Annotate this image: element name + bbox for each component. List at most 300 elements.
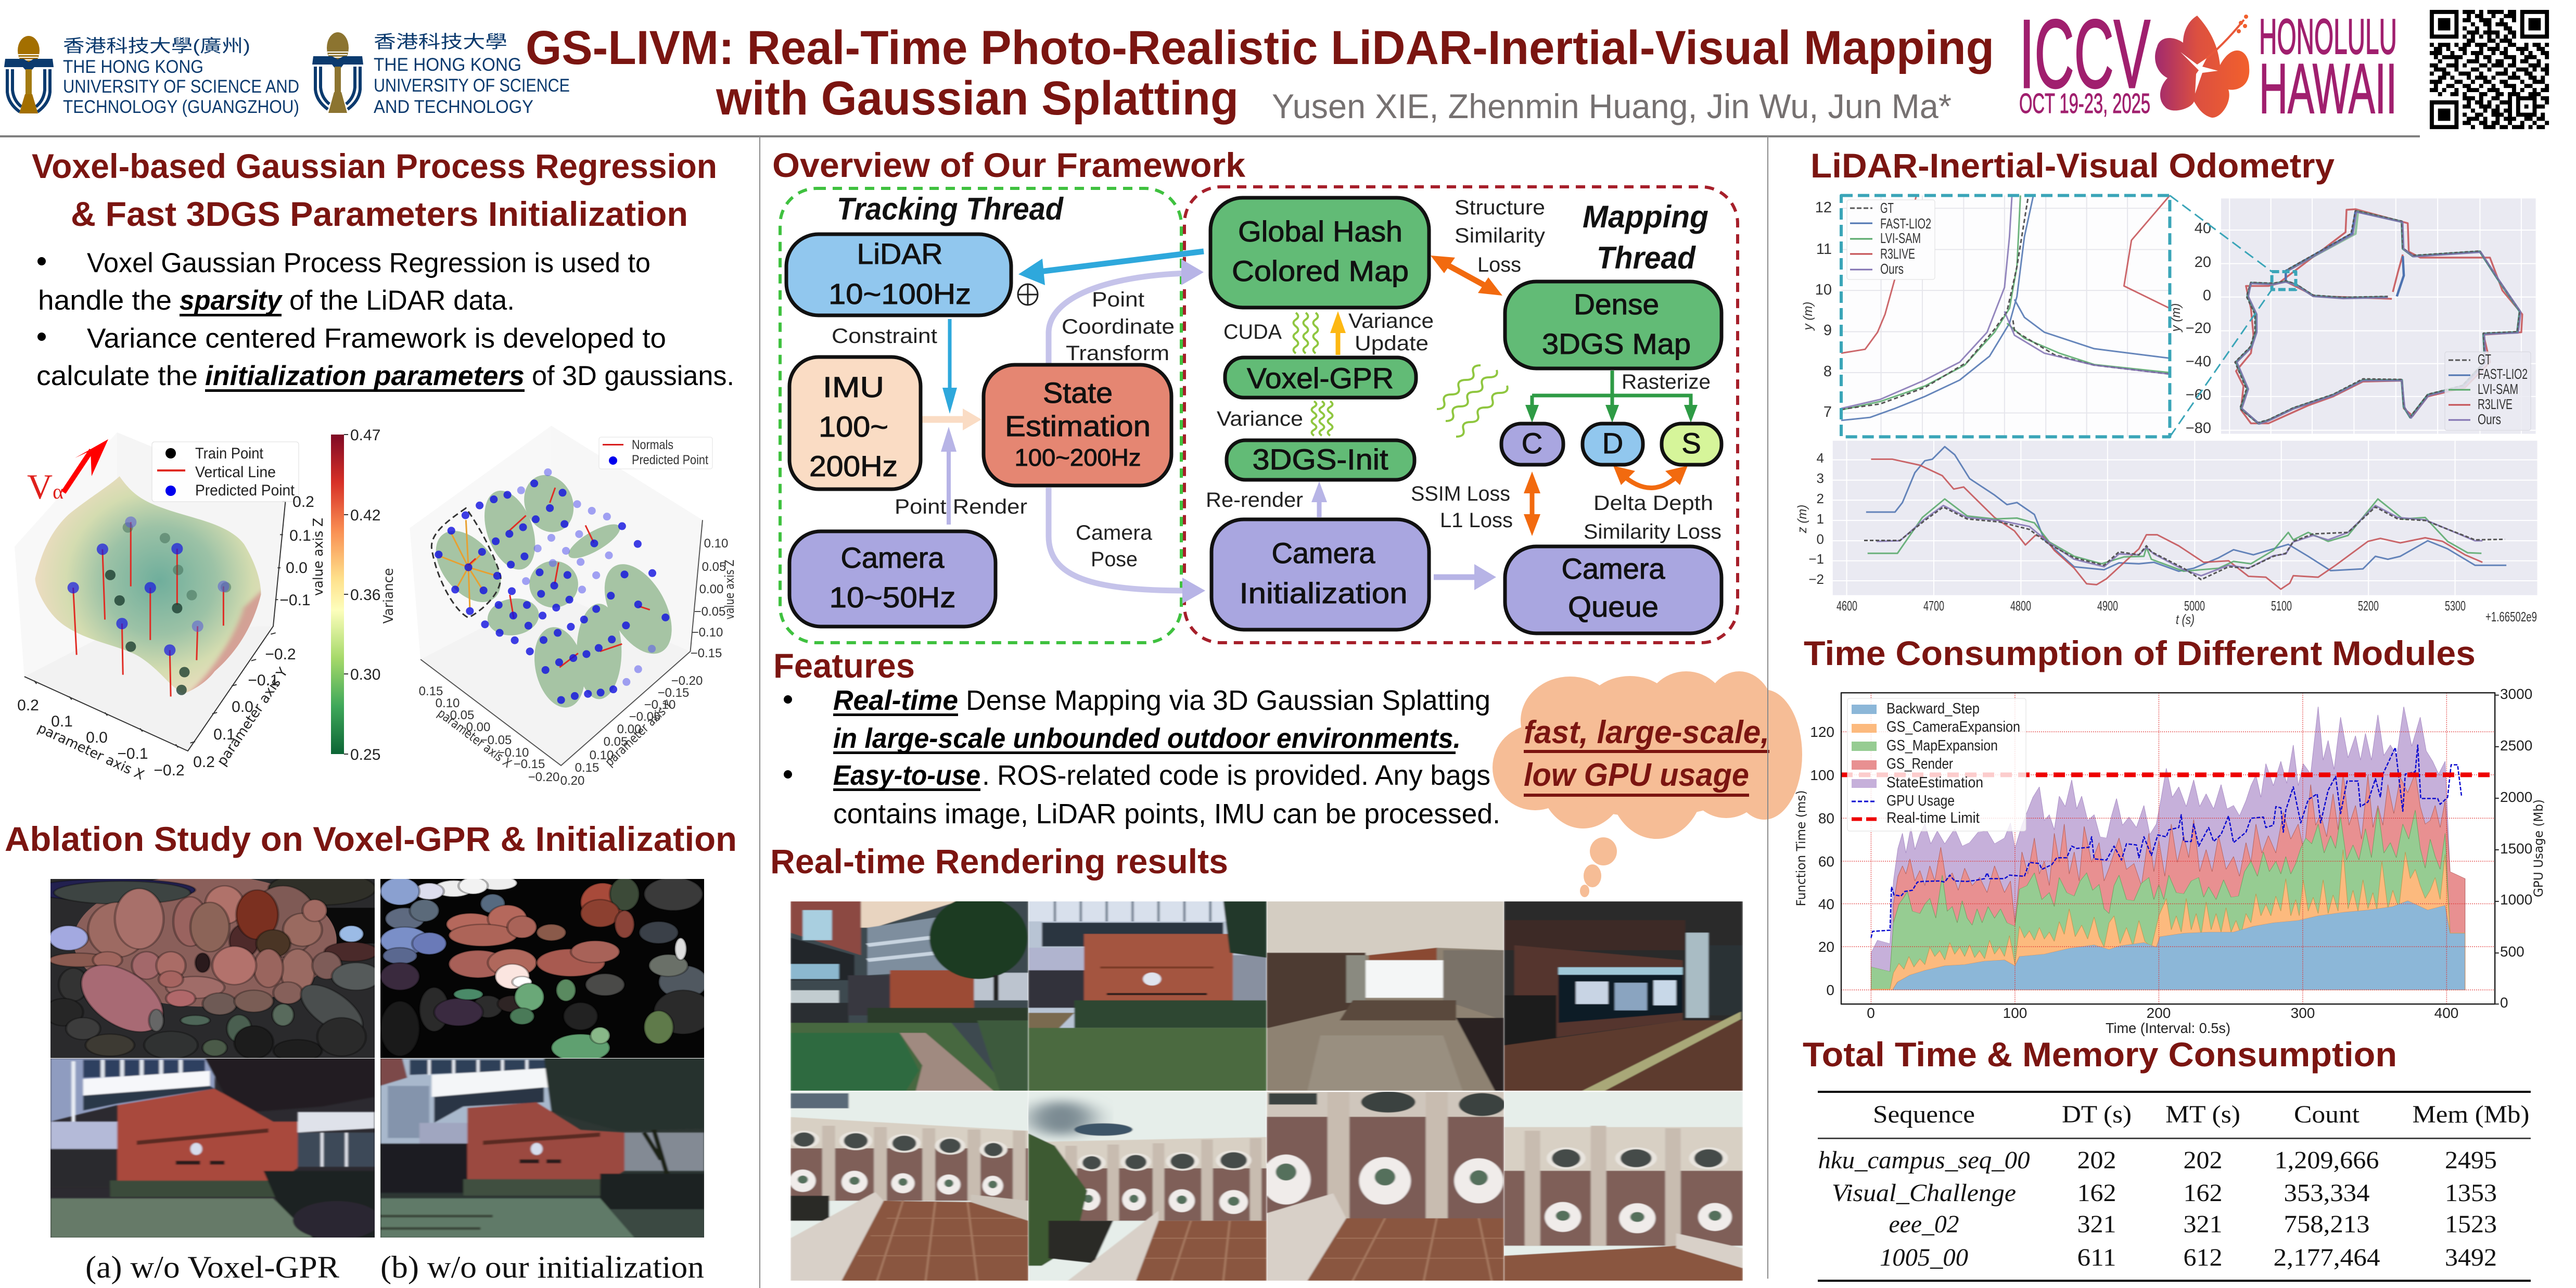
node: dense 3DGS map: Dense bbox=[1574, 288, 1659, 321]
node: state estimation: 100~200Hz bbox=[1015, 444, 1141, 471]
axis labels: scatter plot: −0.10 bbox=[644, 698, 675, 712]
labels: flow annotations: Rasterize bbox=[1622, 371, 1711, 393]
axis labels: z plot: 0 bbox=[1817, 531, 1824, 547]
arrow: camera init to queue bbox=[1434, 564, 1496, 590]
legend: time chart: GS_CameraExpansion bbox=[1886, 719, 2020, 735]
axis labels: inset: 8 bbox=[1823, 363, 1832, 380]
figure: rendering without our initialization bbox=[380, 1059, 704, 1238]
axis labels: scatter plot: 0.15 bbox=[419, 684, 443, 698]
title: GS-LIVM: Real-Time Photo-Realistic LiDAR-Inertial-Visual Mapping bbox=[526, 21, 1994, 74]
node: camera sensor bbox=[789, 531, 996, 627]
axis title: trajectory y: y (m) bbox=[2169, 303, 2183, 333]
heading: time consumption: Time Consumption of Different Modules bbox=[1804, 634, 2476, 672]
heading: rendering results: Real-time Rendering results bbox=[770, 842, 1228, 881]
legend: trajectory: LVI-SAM bbox=[2478, 381, 2518, 397]
legend: scatter plot: Normals bbox=[632, 438, 673, 452]
axis labels: scatter plot: −0.15 bbox=[691, 646, 722, 660]
axis labels: surface plot: value axis Z bbox=[311, 518, 326, 596]
axis labels: time chart: 40 bbox=[1818, 896, 1834, 912]
text block: GPR bullets: sparsity bbox=[180, 285, 283, 316]
axis labels: surface plot: 0.1 bbox=[213, 726, 235, 743]
legend: time chart: GS_MapExpansion bbox=[1886, 737, 1998, 754]
photo: arched building C bbox=[1267, 1092, 1504, 1281]
axis labels: z plot: +1.66502e9 bbox=[2485, 609, 2537, 624]
text: HAWAII: HAWAII bbox=[2259, 49, 2397, 128]
node: camera queue: Camera bbox=[1561, 552, 1665, 585]
text block: features bullets: Real-time bbox=[833, 685, 958, 716]
axis labels: scatter plot: 0.10 bbox=[436, 696, 460, 710]
axis labels: time chart: 120 bbox=[1810, 724, 1834, 740]
chart: variance surface 3D plot bbox=[15, 427, 397, 783]
table header: MT (s) bbox=[2165, 1101, 2240, 1128]
panel: total time and memory bbox=[1803, 1035, 2531, 1282]
heading: voxel-based GPR line 1: Voxel-based Gaussian Process Regression bbox=[32, 147, 717, 185]
axis labels: scatter plot: −0.20 bbox=[671, 674, 703, 688]
text: HKUST GZ English line 1: THE HONG KONG bbox=[63, 57, 203, 77]
text block: GPR bullets: initialization parameters bbox=[205, 361, 525, 391]
photo: arched building D bbox=[1504, 1092, 1743, 1281]
photo: campus building close bbox=[1028, 901, 1267, 1091]
table row: eee_02: eee_02 bbox=[1889, 1210, 1959, 1238]
table header: Mem (Mb) bbox=[2413, 1101, 2529, 1128]
axis labels: z plot: 5300 bbox=[2445, 598, 2466, 614]
text: ICCV: ICCV bbox=[2019, 0, 2150, 108]
heading: overview: Overview of Our Framework bbox=[772, 146, 1245, 184]
axis labels: surface plot: −0.1 bbox=[117, 745, 148, 762]
axis labels: scatter plot: 0.05 bbox=[450, 708, 474, 722]
photo: arched building B bbox=[1028, 1092, 1267, 1281]
text: HKUST GZ Chinese name: 香港科技大學(廣州) bbox=[63, 36, 250, 56]
axis labels: scatter plot: 0.00 bbox=[617, 722, 641, 736]
axis labels: time chart: 1000 bbox=[2500, 891, 2532, 908]
node: 3DGS-Init: 3DGS-Init bbox=[1252, 443, 1388, 476]
node: global hash colored map: Global Hash bbox=[1238, 215, 1402, 248]
table row: Visual_Challenge: 162 bbox=[2077, 1179, 2116, 1207]
arrow: SSIM and L1 loss bbox=[1524, 471, 1540, 536]
text block: GPR bullets: calculate the bbox=[36, 361, 198, 391]
arrow: map to LiDAR bbox=[1018, 251, 1204, 285]
table row: hku_campus_seq_00: 1,209,666 bbox=[2274, 1146, 2379, 1174]
text: cloud line 2: low GPU usage bbox=[1524, 757, 1749, 793]
node: dense 3DGS map: 3DGS Map bbox=[1542, 327, 1691, 360]
node: IMU: IMU bbox=[823, 371, 884, 403]
chart: z over time bbox=[1795, 441, 2537, 627]
axis labels: z plot: 4700 bbox=[1923, 598, 1944, 614]
axis labels: scatter plot: −0.15 bbox=[658, 686, 689, 700]
node: IMU bbox=[789, 357, 921, 489]
legend: inset: Ours bbox=[1880, 261, 1904, 277]
labels: flow annotations: Variance bbox=[1348, 310, 1434, 333]
table row: 1005_00: 611 bbox=[2077, 1244, 2116, 1271]
axis labels: time chart: 2000 bbox=[2500, 789, 2532, 805]
logo: HKUST bbox=[312, 32, 570, 117]
colorbar: variance: Variance bbox=[381, 568, 397, 623]
node: IMU: 100~ bbox=[819, 410, 888, 443]
photo: indoor wall with boards bbox=[1504, 901, 1743, 1091]
axis labels: trajectory: −20 bbox=[2186, 320, 2211, 337]
legend: scatter plot: Predicted Point bbox=[632, 453, 708, 467]
table row: hku_campus_seq_00: 202 bbox=[2184, 1146, 2222, 1174]
table row: hku_campus_seq_00: 2495 bbox=[2445, 1146, 2497, 1174]
legend: trajectory: GT bbox=[2478, 351, 2491, 367]
table row: 1005_00: 612 bbox=[2184, 1244, 2222, 1271]
text: HKUST GZ English line 3: TECHNOLOGY (GUANGZHOU) bbox=[63, 97, 299, 117]
node: S bbox=[1662, 424, 1721, 465]
node: state estimation bbox=[984, 365, 1171, 486]
legend: surface plot: Vertical Line bbox=[195, 464, 276, 481]
axis labels: surface plot: parameter axis X bbox=[35, 720, 146, 783]
label: mapping thread: Thread bbox=[1597, 240, 1696, 275]
axis labels: time chart: 20 bbox=[1818, 939, 1834, 955]
axis labels: z plot: 1 bbox=[1817, 511, 1824, 527]
table row: eee_02: 1523 bbox=[2445, 1210, 2497, 1238]
node: global hash colored map bbox=[1210, 198, 1429, 308]
text: HKUST GZ English line 2: UNIVERSITY OF SCIENCE AND bbox=[63, 76, 299, 97]
axis labels: surface plot bbox=[17, 493, 326, 783]
axis labels: scatter plot: −0.15 bbox=[514, 757, 545, 771]
heading: ablation study: Ablation Study on Voxel-GPR & Initialization bbox=[5, 820, 737, 858]
text block: features bullets: ROS-related code is provided. Any bags bbox=[997, 760, 1490, 791]
labels: flow annotations: Pose bbox=[1091, 548, 1138, 571]
arrow: variance update bbox=[1330, 311, 1346, 355]
node: D bbox=[1583, 424, 1643, 465]
labels: flow annotations: Update bbox=[1355, 332, 1429, 355]
axis labels: inset: 9 bbox=[1823, 322, 1832, 339]
text: HKUST English line 1: THE HONG KONG bbox=[374, 55, 521, 75]
chart: 3D gaussians scatter plot bbox=[410, 426, 737, 788]
node: camera initialization: Initialization bbox=[1240, 577, 1407, 609]
axis labels: z plot: t (s) bbox=[2176, 611, 2195, 627]
labels: flow annotations: Loss bbox=[1477, 253, 1521, 276]
table header bbox=[1873, 1101, 2529, 1128]
axis labels: trajectory: −40 bbox=[2186, 353, 2211, 370]
arrow: structure similarity loss bbox=[1431, 256, 1502, 296]
axis labels: surface plot: 0.0 bbox=[232, 698, 253, 716]
logo: ICCV Honolulu Hawaii bbox=[2019, 0, 2397, 128]
box: mapping thread bbox=[1184, 187, 1738, 643]
axis labels: time chart: Time (Interval: 0.5s) bbox=[2106, 1020, 2230, 1036]
node: camera sensor: 10~50Hz bbox=[830, 581, 955, 614]
table row: Visual_Challenge: 353,334 bbox=[2284, 1179, 2370, 1207]
axis labels: scatter plot: 0.05 bbox=[604, 735, 628, 749]
axis labels: scatter plot: 0.05 bbox=[702, 560, 726, 574]
axis labels: z plot: −2 bbox=[1808, 571, 1824, 587]
text block: features bullets: . bbox=[982, 760, 990, 791]
axis labels: z plot: 4600 bbox=[1837, 598, 1857, 614]
labels: flow annotations: Variance bbox=[1217, 407, 1303, 430]
axis labels: surface plot: 0.1 bbox=[289, 527, 311, 544]
chart: zoomed trajectory inset bbox=[1801, 196, 2296, 437]
icon: HKUST emblem bbox=[312, 32, 363, 113]
text block: GPR bullets: Voxel Gaussian Process Regression is used to bbox=[87, 248, 651, 278]
icon: variance squiggles bbox=[1311, 401, 1332, 436]
axis title: GPU usage: GPU Usage (Mb) bbox=[2531, 799, 2546, 897]
labels: flow annotations: Transform bbox=[1066, 342, 1169, 365]
labels: flow annotations bbox=[832, 196, 1721, 571]
table row: hku_campus_seq_00: 202 bbox=[2077, 1146, 2116, 1174]
node: camera initialization bbox=[1212, 519, 1429, 630]
axis labels: surface plot: 0.1 bbox=[51, 713, 73, 730]
axis labels: inset: 11 bbox=[1816, 241, 1832, 258]
text block: features bullets: Dense Mapping via 3D Gaussian Splatting bbox=[966, 685, 1490, 716]
node: 3DGS-Init bbox=[1227, 440, 1414, 480]
axis labels: surface plot: −0.2 bbox=[265, 646, 296, 663]
table header: Sequence bbox=[1873, 1101, 1975, 1128]
axis labels: time chart: 0 bbox=[1826, 982, 1834, 998]
axis labels: trajectory bbox=[2186, 220, 2211, 437]
label: tracking thread: Tracking Thread bbox=[837, 192, 1064, 226]
axis labels: z plot: 5200 bbox=[2358, 598, 2379, 614]
legend: trajectory bbox=[2445, 351, 2531, 430]
axis labels: time chart: 500 bbox=[2500, 943, 2524, 960]
text block: GPR bullets: of the LiDAR data. bbox=[289, 285, 515, 316]
axis labels: time chart: 60 bbox=[1818, 853, 1834, 870]
axis title: z: z (m) bbox=[1795, 505, 1809, 533]
table: consumption bbox=[1818, 1091, 2531, 1282]
labels: flow annotations: Coordinate bbox=[1062, 315, 1175, 338]
axis labels: inset: 12 bbox=[1815, 199, 1832, 216]
node: C bbox=[1501, 424, 1563, 465]
caption: w/o our initialization: (b) w/o our initialization bbox=[380, 1250, 704, 1284]
text: HKUST English line 3: AND TECHNOLOGY bbox=[374, 97, 533, 117]
axis labels: inset: 7 bbox=[1823, 404, 1832, 420]
axis labels: time chart: 400 bbox=[2434, 1005, 2458, 1021]
labels: flow annotations: Similarity bbox=[1455, 224, 1545, 247]
callout: thought cloud bbox=[1493, 671, 1802, 897]
axis labels: z plot: −1 bbox=[1808, 551, 1824, 567]
figure: rendering without Voxel-GPR bbox=[50, 1059, 375, 1238]
axis labels: trajectory: 20 bbox=[2195, 254, 2211, 271]
table row: 1005_00: 3492 bbox=[2445, 1244, 2497, 1271]
label: mapping thread: Mapping bbox=[1583, 199, 1708, 234]
text block: features bullets: contains image, LiDAR points, IMU can be processed. bbox=[833, 798, 1500, 830]
axis labels: inset bbox=[1815, 199, 1832, 420]
table row: eee_02: 321 bbox=[2077, 1210, 2116, 1238]
annotation: V alpha arrow bbox=[27, 439, 108, 506]
legend: time chart: GPU Usage bbox=[1886, 793, 1955, 809]
photo: indoor corridor bbox=[1267, 901, 1504, 1091]
table row: eee_02 bbox=[1889, 1210, 2497, 1238]
axis labels: scatter plot: parameter axis Y bbox=[602, 697, 675, 769]
arrow: re-render bbox=[1311, 481, 1327, 517]
caption: w/o Voxel-GPR: (a) w/o Voxel-GPR bbox=[85, 1250, 339, 1284]
node: global hash colored map: Colored Map bbox=[1232, 254, 1409, 287]
text block: GPR bullets: Variance centered Framework is developed to bbox=[87, 323, 666, 354]
text block: GPR bullets: of 3D gaussians. bbox=[532, 361, 734, 391]
title bbox=[526, 21, 1994, 125]
chart: trajectory overview bbox=[2169, 198, 2536, 437]
heading: total time: Total Time & Memory Consumption bbox=[1803, 1035, 2397, 1074]
legend: time chart: GS_Render bbox=[1886, 756, 1953, 772]
legend: trajectory: FAST-LIO2 bbox=[2478, 366, 2528, 382]
node: Voxel-GPR: Voxel-GPR bbox=[1247, 362, 1394, 394]
axis labels: scatter plot: 0.20 bbox=[560, 774, 584, 788]
axis labels: scatter plot: parameter axis X bbox=[435, 706, 514, 771]
label: mapping thread bbox=[1583, 199, 1708, 275]
text block: features bullets: in large-scale unbounded outdoor environments. bbox=[833, 723, 1461, 754]
figure: gaussians without our initialization bbox=[380, 879, 704, 1058]
diagram: framework bbox=[780, 187, 1738, 643]
table row: Visual_Challenge: 162 bbox=[2184, 1179, 2222, 1207]
text block: GPR bullets: handle the bbox=[38, 285, 172, 316]
table row: eee_02: 321 bbox=[2184, 1210, 2222, 1238]
axis labels: scatter plot bbox=[419, 537, 737, 788]
legend: surface plot bbox=[152, 442, 299, 502]
legend: trajectory: Ours bbox=[2478, 411, 2501, 427]
colorbar: variance: 0.42 bbox=[350, 507, 380, 524]
colorbar: variance bbox=[331, 427, 397, 763]
colorbar: variance: 0.36 bbox=[350, 586, 380, 604]
icon: QR code bbox=[2430, 10, 2549, 129]
node: Voxel-GPR bbox=[1225, 358, 1416, 398]
divider: middle and right columns bbox=[1767, 136, 1768, 1279]
node: IMU: 200Hz bbox=[809, 450, 898, 482]
axis labels: trajectory: 0 bbox=[2203, 287, 2211, 304]
axis labels: scatter plot: −0.05 bbox=[480, 733, 512, 747]
axis labels: inset: 10 bbox=[1815, 282, 1832, 298]
axis labels: scatter plot: −0.20 bbox=[528, 770, 559, 784]
axis labels: surface plot: 0.2 bbox=[292, 493, 314, 511]
axis labels: z plot: 4900 bbox=[2097, 598, 2118, 614]
text: conference date: OCT 19-23, 2025 bbox=[2019, 88, 2150, 119]
logo: HKUST Guangzhou bbox=[4, 36, 299, 117]
axis labels: scatter plot: 0.15 bbox=[575, 761, 599, 775]
figure: gaussians without Voxel-GPR bbox=[50, 879, 375, 1058]
heading: features: Features bbox=[773, 646, 915, 685]
axis labels: z plot: 5000 bbox=[2184, 598, 2205, 614]
node: state estimation: Estimation bbox=[1005, 410, 1151, 442]
authors: Yusen XIE, Zhenmin Huang, Jin Wu, Jun Ma* bbox=[1272, 87, 1952, 125]
axis labels: time chart: 80 bbox=[1818, 810, 1834, 826]
arrow: delta depth loss bbox=[1613, 466, 1688, 488]
labels: flow annotations: Structure bbox=[1455, 196, 1545, 219]
axis labels: time chart: 200 bbox=[2147, 1005, 2171, 1021]
legend: scatter plot bbox=[599, 437, 712, 469]
colorbar: variance: 0.47 bbox=[350, 427, 380, 444]
legend: time chart: Real-time Limit bbox=[1886, 810, 1980, 826]
axis labels: time chart: 0 bbox=[2500, 994, 2508, 1011]
text block: features bullets bbox=[784, 685, 1500, 830]
node: camera sensor: Camera bbox=[841, 541, 945, 574]
axis labels: scatter plot: 0.00 bbox=[466, 720, 490, 734]
labels: flow annotations: Constraint bbox=[832, 325, 937, 348]
labels: flow annotations: L1 Loss bbox=[1440, 509, 1513, 532]
figure: rendering grid bbox=[790, 896, 1743, 1281]
axis labels: trajectory: −60 bbox=[2186, 387, 2211, 403]
axis labels: z plot: 3 bbox=[1817, 470, 1824, 486]
box: tracking thread bbox=[780, 188, 1181, 643]
axis labels: scatter plot: −0.05 bbox=[629, 710, 660, 724]
node: camera queue: Queue bbox=[1568, 590, 1659, 623]
underline: cloud line 2 bbox=[1524, 794, 1749, 797]
axis labels: scatter plot: value axis Z bbox=[722, 560, 737, 619]
labels: flow annotations: Point Render bbox=[895, 495, 1027, 518]
labels: flow annotations: SSIM Loss bbox=[1411, 482, 1510, 505]
panel: voxel-based GPR and initialization bbox=[5, 147, 737, 1284]
node: S: S bbox=[1681, 427, 1701, 460]
node: dense 3DGS map bbox=[1505, 282, 1721, 368]
axis labels: trajectory: −80 bbox=[2186, 420, 2211, 437]
labels: flow annotations: Similarity Loss bbox=[1584, 520, 1721, 543]
icon: HKUST GZ emblem bbox=[4, 36, 54, 113]
legend: trajectory: R3LIVE bbox=[2478, 396, 2513, 412]
axis labels: time chart: 1500 bbox=[2500, 840, 2532, 857]
node: LiDAR: LiDAR bbox=[857, 237, 943, 270]
legend: surface plot: Predicted Point bbox=[195, 482, 295, 499]
table row: 1005_00: 1005_00 bbox=[1880, 1244, 1968, 1271]
icon: diagonal squiggles bbox=[1437, 365, 1508, 437]
panel: time consumption bbox=[1794, 634, 2546, 1036]
table row: hku_campus_seq_00: hku_campus_seq_00 bbox=[1818, 1146, 2030, 1174]
legend: time chart: StateEstimation bbox=[1886, 774, 1983, 791]
axis labels: surface plot: 0.2 bbox=[193, 754, 215, 771]
labels: flow annotations: CUDA bbox=[1223, 321, 1282, 343]
labels: flow annotations: Re-render bbox=[1206, 489, 1303, 512]
axis labels: scatter plot: 0.00 bbox=[699, 582, 723, 596]
table row: hku_campus_seq_00 bbox=[1818, 1146, 2497, 1174]
legend: inset: LVI-SAM bbox=[1880, 230, 1921, 246]
legend: inset: GT bbox=[1880, 200, 1894, 216]
icon: CUDA squiggles bbox=[1294, 313, 1318, 353]
text: HKUST Chinese name: 香港科技大學 bbox=[374, 32, 507, 52]
colorbar: variance: 0.30 bbox=[350, 666, 380, 683]
node: camera queue bbox=[1505, 546, 1721, 633]
axis labels: scatter plot: 0.10 bbox=[704, 537, 728, 551]
axis labels: surface plot: 0.2 bbox=[17, 697, 39, 714]
heading: odometry: LiDAR-Inertial-Visual Odometry bbox=[1810, 146, 2335, 185]
axis labels: z plot bbox=[1808, 450, 2537, 627]
axis labels: surface plot: −0.1 bbox=[279, 592, 311, 609]
chart: stacked area of module time bbox=[1794, 686, 2546, 1036]
axis labels: z plot: 5100 bbox=[2271, 598, 2292, 614]
text block: features bullets: Easy-to-use bbox=[833, 760, 980, 791]
axis labels: scatter plot: −0.10 bbox=[498, 746, 529, 760]
panel: LiDAR-inertial-visual odometry bbox=[1795, 146, 2537, 627]
table header: Count bbox=[2294, 1101, 2360, 1128]
divider: left and middle columns bbox=[759, 136, 760, 1288]
arrow: point render bbox=[941, 427, 957, 525]
text: HONOLULU bbox=[2259, 9, 2397, 65]
axis labels: scatter plot: −0.05 bbox=[694, 605, 725, 619]
node: state estimation: State bbox=[1043, 376, 1113, 409]
arrow: IMU to state bbox=[922, 409, 981, 430]
title: with Gaussian Splatting bbox=[716, 72, 1239, 125]
underline: cloud line 1 bbox=[1524, 750, 1769, 753]
annotation: V alpha arrow: Vα bbox=[27, 467, 63, 506]
node: C: C bbox=[1522, 427, 1542, 460]
icon: hibiscus flower bbox=[2155, 15, 2249, 118]
legend: time chart bbox=[1847, 698, 2026, 831]
photo: arched building A bbox=[790, 1092, 1028, 1281]
axis labels: surface plot: −0.1 bbox=[248, 672, 279, 689]
legend: surface plot: Train Point bbox=[195, 445, 264, 462]
axis labels: scatter plot: 0.10 bbox=[590, 748, 614, 762]
table row: 1005_00 bbox=[1880, 1244, 2497, 1271]
legend: inset bbox=[1847, 200, 1935, 279]
axis title: function time: Function Time (ms) bbox=[1794, 790, 1808, 907]
legend: inset: R3LIVE bbox=[1880, 246, 1915, 262]
labels: flow annotations: Camera bbox=[1076, 521, 1153, 544]
legend: inset: FAST-LIO2 bbox=[1880, 215, 1931, 232]
text: HKUST English line 2: UNIVERSITY OF SCIENCE bbox=[374, 75, 570, 96]
header rule bbox=[0, 135, 2420, 137]
table row: Visual_Challenge bbox=[1832, 1179, 2497, 1207]
arrow: rasterize bbox=[1525, 371, 1698, 423]
arrow: point coordinate transform bbox=[1049, 259, 1204, 363]
table row: Visual_Challenge: 1353 bbox=[2445, 1179, 2497, 1207]
axis labels: trajectory: 40 bbox=[2195, 220, 2211, 237]
photo: campus building wide bbox=[790, 901, 1028, 1091]
